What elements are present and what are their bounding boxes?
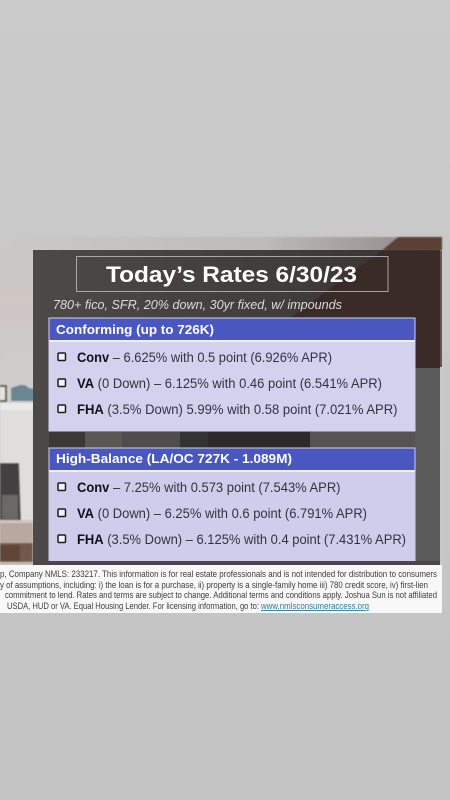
panel: high-balance rates (48, 448, 416, 561)
footer disclaimer (0, 565, 442, 613)
checkbox: conv (58, 353, 66, 360)
rate: fha: FHA (3.5% Down) 5.99% with 0.58 point (7.021% APR) (77, 402, 398, 417)
disclaimer line 4: USDA, HUD or VA. Equal Housing Lender. For licensing information, go to: (7, 601, 259, 611)
title box (76, 256, 388, 292)
high-balance heading: High-Balance (LA/OC 727K - 1.089M) (56, 451, 292, 466)
conforming heading: Conforming (up to 726K) (56, 322, 214, 337)
conforming panel body (48, 318, 416, 432)
background photo: living room (0, 237, 442, 567)
dark overlay panel (33, 250, 442, 565)
high-balance header bar (50, 448, 414, 470)
checkbox: fha (58, 535, 66, 542)
title: Today’s Rates 6/30/23 (106, 262, 357, 287)
checkbox: va (58, 379, 66, 386)
rate: conv: Conv – 7.25% with 0.573 point (7.543% APR) (77, 479, 340, 495)
panel: conforming rates (48, 318, 416, 432)
checkbox: fha (58, 405, 66, 412)
checkbox: va (58, 509, 66, 516)
rate: conv: Conv – 6.625% with 0.5 point (6.926% APR) (77, 350, 332, 365)
rate: va: VA (0 Down) – 6.125% with 0.46 point (6.541% APR) (77, 376, 382, 391)
licensing link: www.nmlsconsumeraccess.org (260, 601, 369, 611)
conforming header bar (50, 318, 414, 340)
subtitle: assumptions: 780+ fico, SFR, 20% down, 30yr fixed, w/ impounds (53, 297, 342, 312)
rate: fha: FHA (3.5% Down) – 6.125% with 0.4 point (7.431% APR) (77, 531, 406, 547)
high-balance panel body (48, 448, 416, 561)
checkbox: conv (58, 483, 66, 490)
rate: va: VA (0 Down) – 6.25% with 0.6 point (6.791% APR) (77, 505, 367, 521)
